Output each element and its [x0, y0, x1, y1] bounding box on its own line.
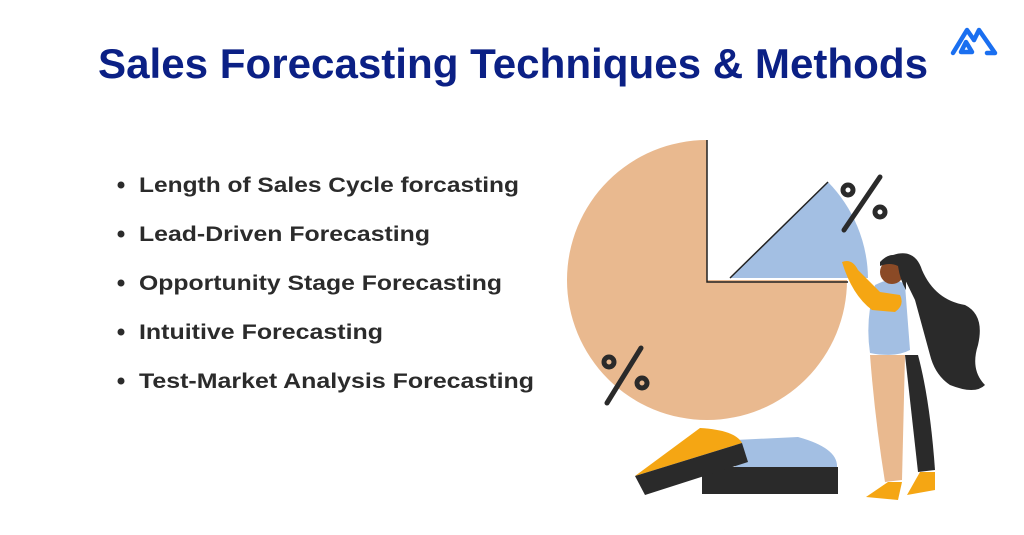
front leg: [870, 355, 905, 482]
bullet list: [118, 174, 534, 393]
pie: beige main: [567, 140, 847, 420]
woman: [842, 253, 985, 500]
shirt: [868, 280, 910, 355]
bullet 3: Opportunity Stage Forecasting: [139, 272, 502, 295]
icon: percent bottom: [604, 348, 647, 403]
bullet 5: Test-Market Analysis Forecasting: [139, 370, 534, 393]
title: Sales Forecasting Techniques & Methods: [98, 40, 928, 87]
bullet 2: Lead-Driven Forecasting: [139, 223, 430, 246]
bullet 1: Length of Sales Cycle forcasting: [139, 174, 519, 197]
shoes: [866, 482, 902, 500]
base pieces: [635, 428, 838, 495]
icon: percent top: [843, 177, 885, 230]
pie: blue slice: [730, 182, 868, 278]
bullet 4: Intuitive Forecasting: [139, 321, 383, 344]
icon: logo: [953, 30, 995, 53]
illustration: pie chart with woman: [567, 140, 985, 500]
hair: [893, 253, 985, 390]
arm: [842, 261, 902, 312]
back leg: [905, 355, 935, 472]
head: [880, 260, 904, 284]
